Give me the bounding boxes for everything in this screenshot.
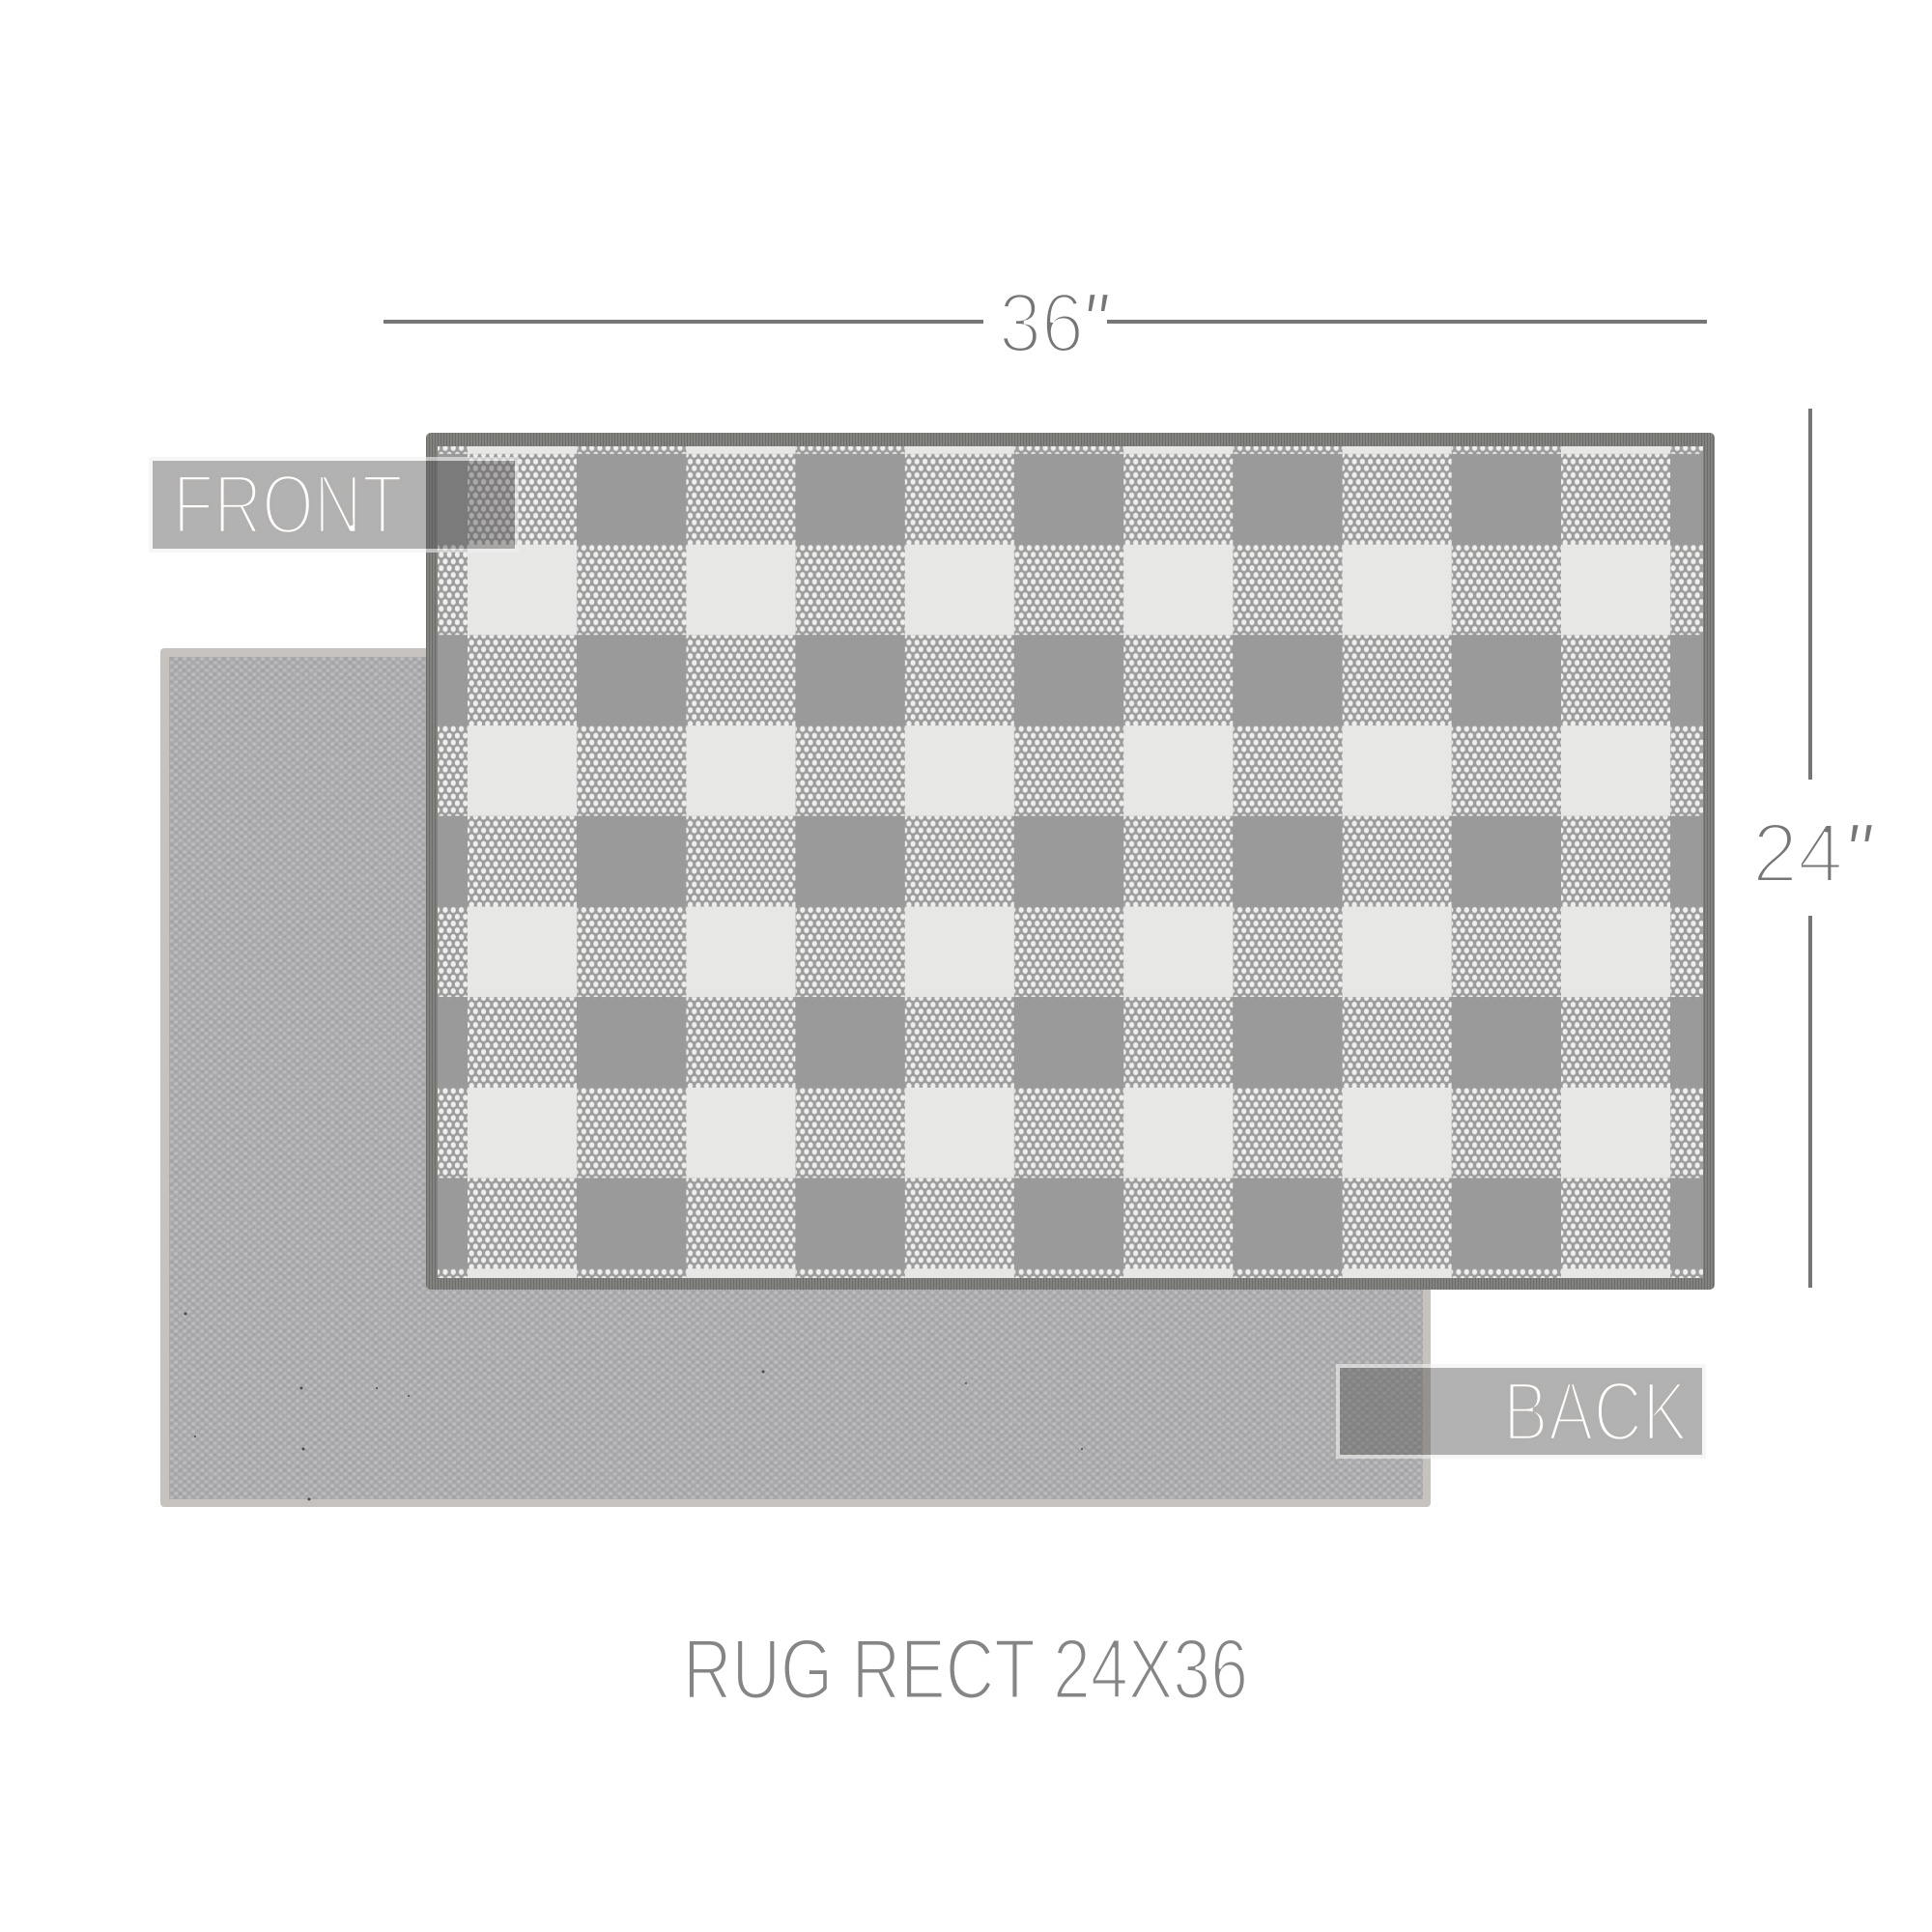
width inch mark: " [1081,276,1109,370]
height dimension: 24 inches [1752,409,1874,1288]
back rug [160,648,1431,1507]
front label text: FRONT [173,458,403,552]
back label halo [1338,1366,1704,1457]
width line left [384,320,983,324]
front rug border [426,433,1715,1290]
back label panel [1340,1368,1702,1455]
width dimension: 36 inches [384,276,1707,370]
height inch mark: " [1843,807,1874,900]
back rug dark flecks [184,1312,1083,1501]
width value: 36 [999,276,1084,370]
label: back [1338,1365,1704,1459]
front rug buffalo check field [438,446,1703,1278]
width line right [1107,320,1707,324]
label: front [151,458,517,552]
front rug [426,433,1715,1290]
height line bottom [1808,916,1812,1288]
back rug grain [169,657,1423,1499]
height value: 24 [1752,807,1843,900]
back rug binding edge [160,648,1431,1507]
front label panel [153,461,515,549]
front label halo [151,459,517,551]
back label text: BACK [1503,1365,1688,1459]
height line top [1808,409,1812,780]
caption: RUG RECT 24X36 [683,1621,1248,1717]
back rug woven field [169,657,1423,1499]
